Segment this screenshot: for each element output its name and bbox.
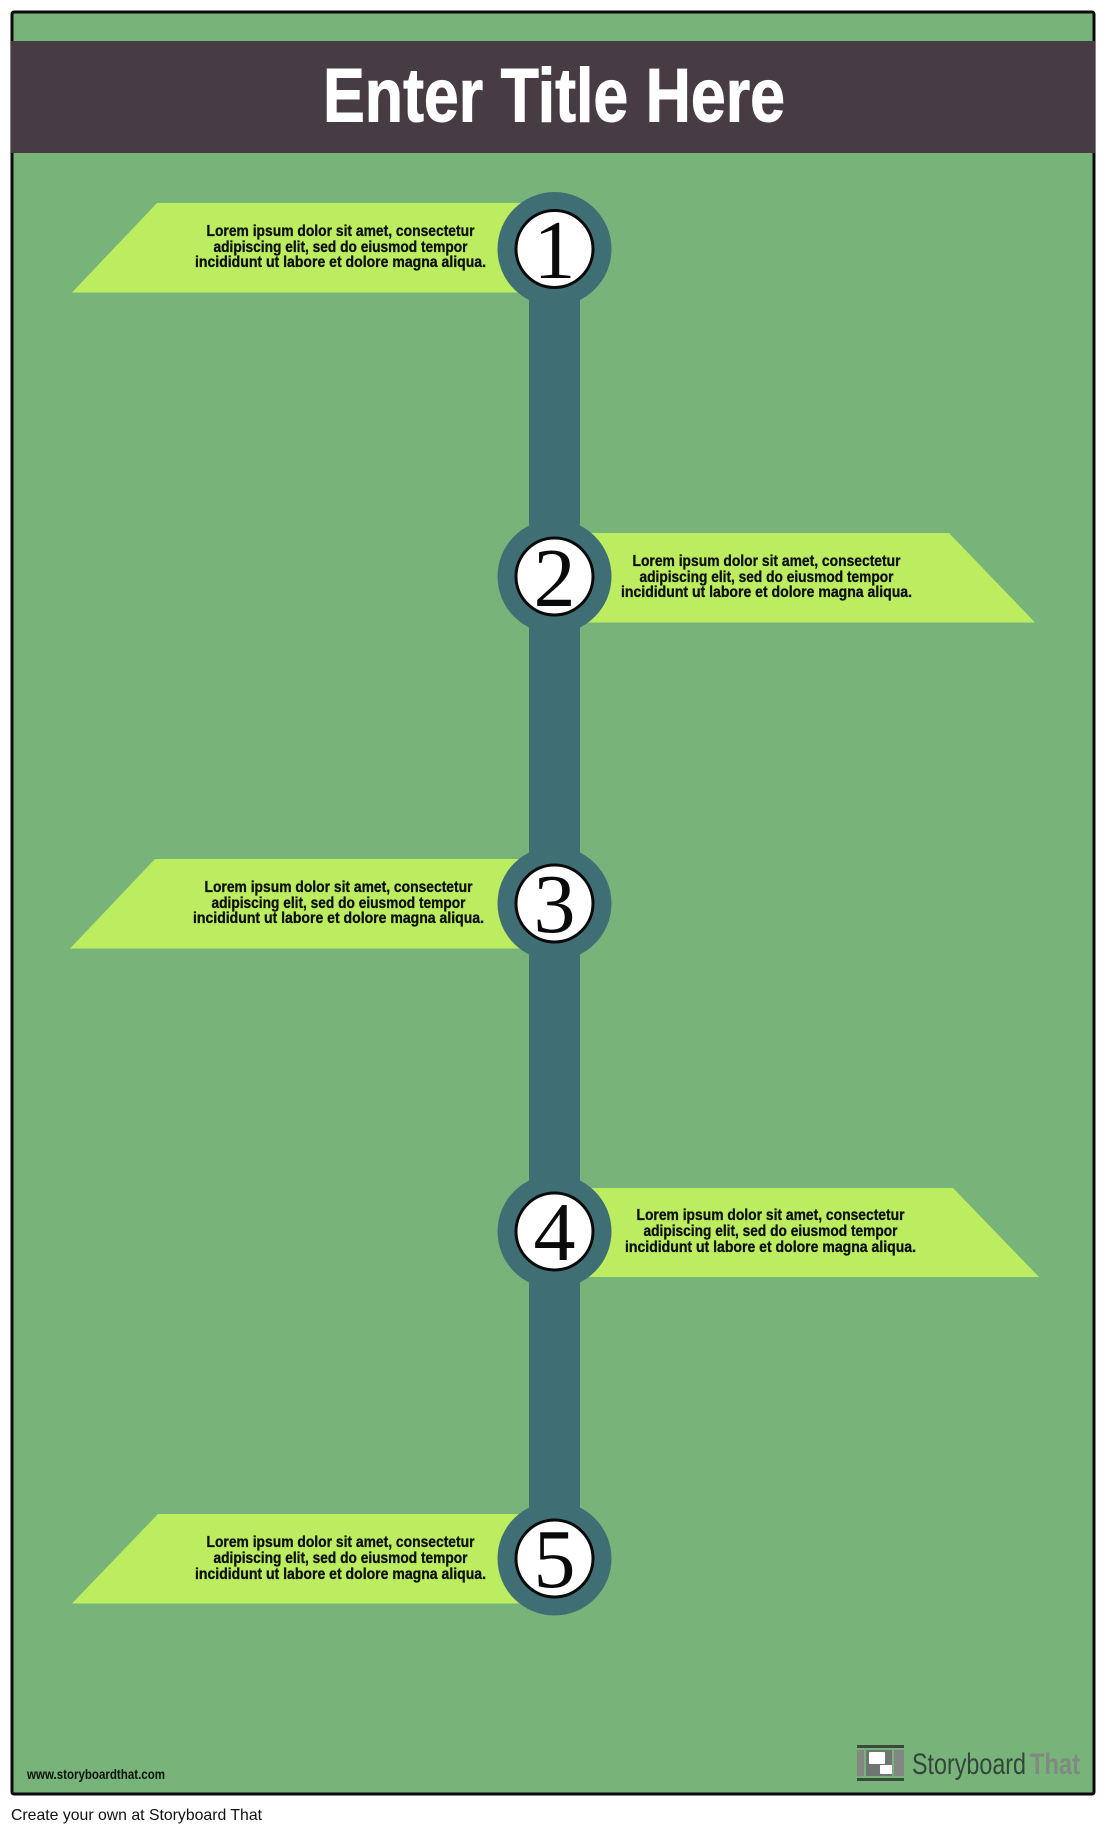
- banner 2 text: Lorem ipsum dolor sit amet, consectetur: [632, 553, 900, 570]
- banner 3 text: [193, 879, 484, 927]
- banner 3: [70, 859, 530, 948]
- marker 4: [498, 1174, 612, 1288]
- banner 4 text: incididunt ut labore et dolore magna aliqua.: [625, 1239, 916, 1256]
- timeline bar: [529, 249, 580, 1559]
- marker 1: 1: [534, 204, 576, 297]
- banner 4: [580, 1188, 1039, 1277]
- marker 5: [498, 1502, 612, 1616]
- banner 1 text: incididunt ut labore et dolore magna aliqua.: [195, 254, 486, 271]
- banner 1 text: [195, 223, 486, 271]
- title: Enter Title Here: [323, 54, 785, 138]
- marker 3: [498, 846, 612, 960]
- icon: storyboard that logo: [857, 1745, 904, 1781]
- logo wordmark: That: That: [1030, 1748, 1080, 1781]
- banner 5 text: [195, 1534, 486, 1583]
- banner 4 text: Lorem ipsum dolor sit amet, consectetur: [636, 1207, 904, 1224]
- banner 3 text: adipiscing elit, sed do eiusmod tempor: [212, 895, 466, 912]
- banner 5 text: adipiscing elit, sed do eiusmod tempor: [214, 1550, 468, 1567]
- marker 5: 5: [534, 1513, 576, 1606]
- marker 3: 3: [534, 858, 576, 951]
- marker 2: [498, 520, 612, 634]
- banner 3 text: incididunt ut labore et dolore magna aliqua.: [193, 910, 484, 927]
- banner 5 text: Lorem ipsum dolor sit amet, consectetur: [206, 1534, 474, 1551]
- banner 1 text: adipiscing elit, sed do eiusmod tempor: [214, 239, 468, 256]
- banner 5: [72, 1514, 530, 1604]
- banner 5 text: incididunt ut labore et dolore magna aliqua.: [195, 1566, 486, 1583]
- banner 2 text: [621, 553, 912, 601]
- banner 1 text: Lorem ipsum dolor sit amet, consectetur: [206, 223, 474, 240]
- title band: [11, 41, 1095, 153]
- banner 4 text: [625, 1207, 916, 1256]
- marker 2: 2: [534, 532, 576, 625]
- logo wordmark: Storyboard: [912, 1748, 1026, 1781]
- banner 2 text: incididunt ut labore et dolore magna aliqua.: [621, 584, 912, 601]
- banner 3 text: Lorem ipsum dolor sit amet, consectetur: [204, 879, 472, 896]
- footer caption: Create your own at Storyboard That: [11, 1807, 263, 1824]
- marker 1: [498, 192, 612, 306]
- banner 2 text: adipiscing elit, sed do eiusmod tempor: [640, 569, 894, 586]
- banner 2: [580, 533, 1035, 622]
- website url: www.storyboardthat.com: [26, 1766, 165, 1782]
- banner 4 text: adipiscing elit, sed do eiusmod tempor: [644, 1223, 898, 1240]
- banner 1: [72, 203, 530, 292]
- marker 4: 4: [534, 1186, 576, 1279]
